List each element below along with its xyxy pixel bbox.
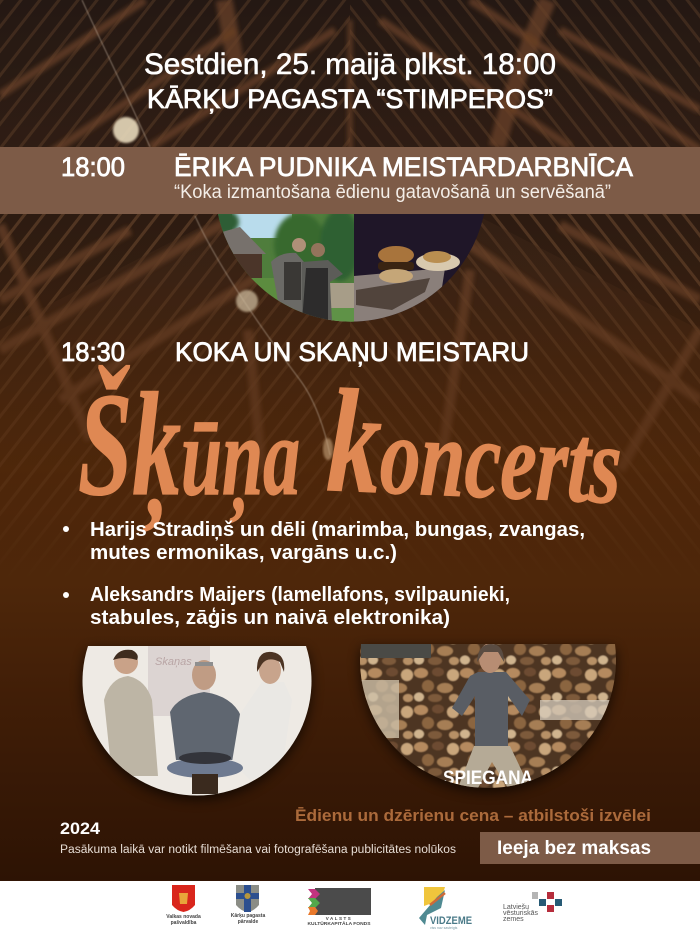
logo: Valka municipality [166, 885, 201, 926]
free entry band [480, 832, 700, 864]
logo: Latvian historical lands: Latviešu [503, 904, 529, 911]
place line: KĀRĶU PAGASTA “STIMPEROS” [147, 84, 553, 114]
logo: Latvian historical lands: zemes [503, 916, 524, 923]
performer two [63, 584, 510, 629]
performer two: stabules, zāģis un naivā elektronika) [90, 607, 450, 629]
logo: Kārķi parish: Kārķu pagasta [231, 913, 265, 919]
free entry band: Ieeja bez maksas [497, 838, 651, 859]
performer one: Harijs Stradiņš un dēli (marimba, bungas, zvangas, [90, 519, 585, 541]
filming notice: Pasākuma laikā var notikt filmēšana vai fotografēšana publicitātes nolūkos [60, 844, 456, 856]
logo: Kārķi parish [231, 885, 265, 925]
logo: State Culture Capital Foundation: VALSTS [326, 916, 352, 921]
concert time: 18:30 [61, 337, 125, 367]
photo: Harijs Stradiņš and sons [82, 646, 312, 796]
concert heading: KOKA UN SKAŅU MEISTARU [175, 337, 529, 367]
performer two: Aleksandrs Maijers (lamellafons, svilpaunieki, [90, 584, 510, 606]
workshop subtitle: “Koka izmantošana ēdienu gatavošanā un servēšanā” [174, 182, 611, 203]
logo: Vidzeme [419, 887, 472, 930]
workshop heading: ĒRIKA PUDNIKA MEISTARDARBNĪCA [174, 152, 633, 182]
photo: workshop hosts and food [211, 209, 484, 324]
logo: State Culture Capital Foundation: KULTŪRKAPITĀLA FONDS [308, 920, 370, 926]
title: barn concert: Šķūņa [78, 363, 300, 533]
logo: Latvian historical lands: vēsturiskās [503, 910, 539, 917]
logo: Vidzeme: viss nav sasteigts [430, 926, 458, 930]
logo: State Culture Capital Foundation [308, 888, 371, 926]
photo shadows [82, 648, 616, 800]
title: barn concert [78, 359, 625, 536]
logo: Kārķi parish: pārvalde [238, 919, 258, 925]
logo: Latvian historical lands [503, 892, 562, 923]
sponsor logo strip [0, 881, 700, 933]
performer one [63, 519, 585, 564]
string of lights [82, 0, 333, 460]
panel: workshop band [0, 147, 700, 214]
photo: Aleksandrs Maijers at woodpile [360, 644, 616, 788]
logo: Valka municipality: pašvaldība [171, 920, 197, 926]
header: date and place [144, 48, 556, 114]
date line: Sestdien, 25. maijā plkst. 18:00 [144, 48, 556, 81]
price note: Ēdienu un dzērienu cena – atbilstoši izvēlei [295, 806, 651, 825]
performer one: mutes ermonikas, vargāns u.c.) [90, 542, 397, 564]
logo: Vidzeme: VIDZEME [430, 915, 472, 927]
photo: Harijs Stradiņš and sons: Skaņas [155, 656, 192, 668]
schedule line: concert [61, 337, 529, 367]
performers list [63, 519, 585, 629]
logo: Valka municipality: Valkas novada [166, 914, 201, 920]
workshop time: 18:00 [61, 152, 125, 182]
year: 2024 [60, 819, 101, 838]
photo caption: SPIEGANA [443, 768, 533, 789]
